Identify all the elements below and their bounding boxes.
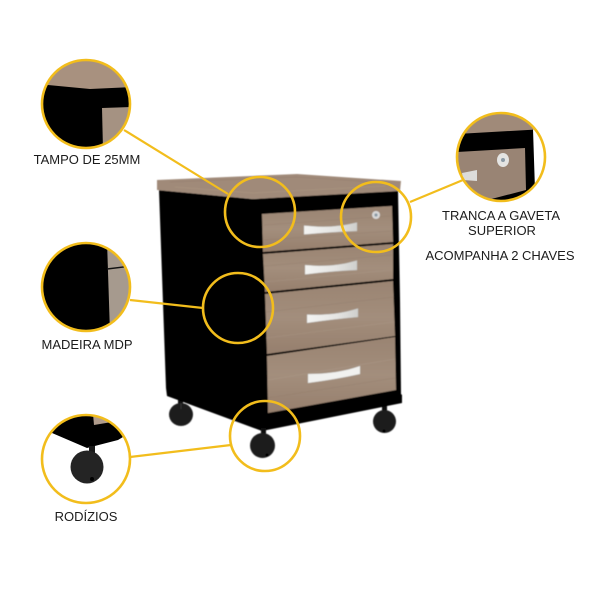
handle 1 [304, 222, 357, 234]
highlight ring: lock [341, 182, 411, 252]
detail inset: MDP [40, 241, 132, 333]
drawer 4 [267, 337, 396, 413]
callout line: top [124, 130, 228, 194]
handle 2 [305, 260, 357, 274]
drawer 1 [262, 206, 393, 252]
detail inset: top thickness [40, 58, 132, 150]
detail inset: lock [456, 112, 546, 202]
pedestal drawer unit [157, 174, 402, 458]
label: lock: ACOMPANHA 2 CHAVES [425, 248, 575, 263]
label: MDP: MADEIRA MDP [41, 337, 133, 352]
black cabinet body [159, 190, 402, 431]
handle 3 [307, 308, 358, 323]
highlight ring: top [225, 177, 295, 247]
highlight ring: MDP [203, 273, 273, 343]
label: casters: RODÍZIOS [55, 509, 118, 524]
callout line: lock [410, 180, 463, 202]
caster: rear left [169, 396, 193, 426]
caster: rear right [373, 403, 396, 433]
callout line: casters [130, 445, 231, 457]
drawer 3 [265, 281, 395, 354]
drawer 2 [263, 244, 393, 292]
caster: front [250, 428, 275, 458]
label: lock [425, 208, 575, 263]
drawer lock [372, 211, 380, 219]
label: lock: SUPERIOR [468, 223, 536, 238]
callout line: MDP [130, 300, 203, 308]
label: lock: TRANCA A GAVETA [442, 208, 560, 223]
handle 4 [308, 366, 360, 383]
wood top [157, 174, 401, 199]
label: top: TAMPO DE 25MM [34, 152, 140, 167]
detail inset: caster [40, 410, 132, 505]
highlight ring: caster [230, 401, 300, 471]
